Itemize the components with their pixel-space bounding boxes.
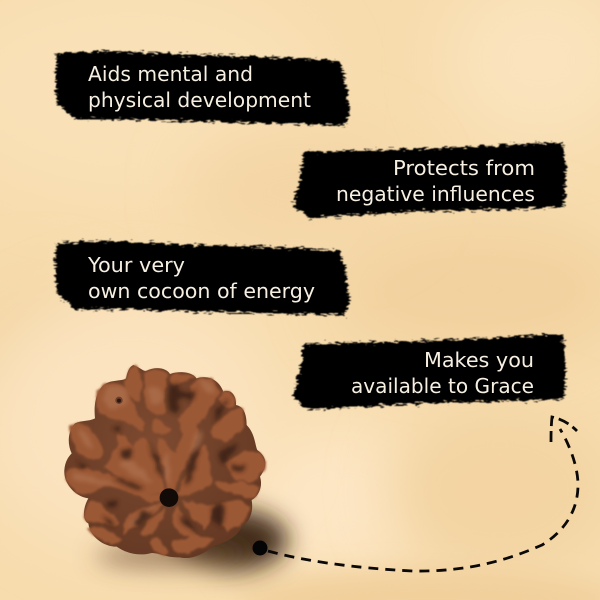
bead small hole (115, 397, 123, 404)
bead crevices (75, 383, 247, 533)
text: your very own cocoon of energy: Your very (87, 253, 185, 277)
text: makes you available to grace: available to Grace (351, 374, 534, 398)
brush stroke 1 (55, 51, 350, 125)
brush stroke 4 (293, 335, 566, 410)
text: your very own cocoon of energy (87, 253, 315, 303)
arrow head: dashed (551, 417, 577, 442)
text: aids mental and physical development (88, 62, 311, 112)
text: makes you available to grace (351, 348, 534, 398)
text: aids mental and physical development: physical development (88, 88, 311, 112)
bead ridges (66, 366, 265, 555)
brush stroke 3 (55, 241, 350, 315)
text: makes you available to grace: Makes you (424, 348, 534, 372)
text: protects from negative influences: Protects from (393, 156, 535, 180)
text: protects from negative influences: negative influences (336, 182, 535, 206)
brush stroke 2 (293, 143, 566, 218)
panel: benefit 3 brush label (55, 241, 350, 315)
shadow under bead (95, 509, 288, 571)
bead center hole (160, 488, 178, 507)
panel: benefit 2 brush label (293, 143, 566, 218)
icon: start dot of arrow (252, 540, 268, 556)
text: aids mental and physical development: Aids mental and (88, 62, 253, 86)
arrow: dashed curve to last label (268, 429, 578, 571)
panel: benefit 4 brush label (293, 335, 566, 410)
bead inner small hole (117, 399, 121, 403)
text: your very own cocoon of energy: own cocoon of energy (88, 279, 315, 303)
bead body (64, 365, 265, 558)
icon: rudraksha bead (64, 365, 265, 558)
text: protects from negative influences (336, 156, 535, 206)
panel: benefit 1 brush label (55, 51, 350, 125)
bead highlights (73, 380, 215, 527)
